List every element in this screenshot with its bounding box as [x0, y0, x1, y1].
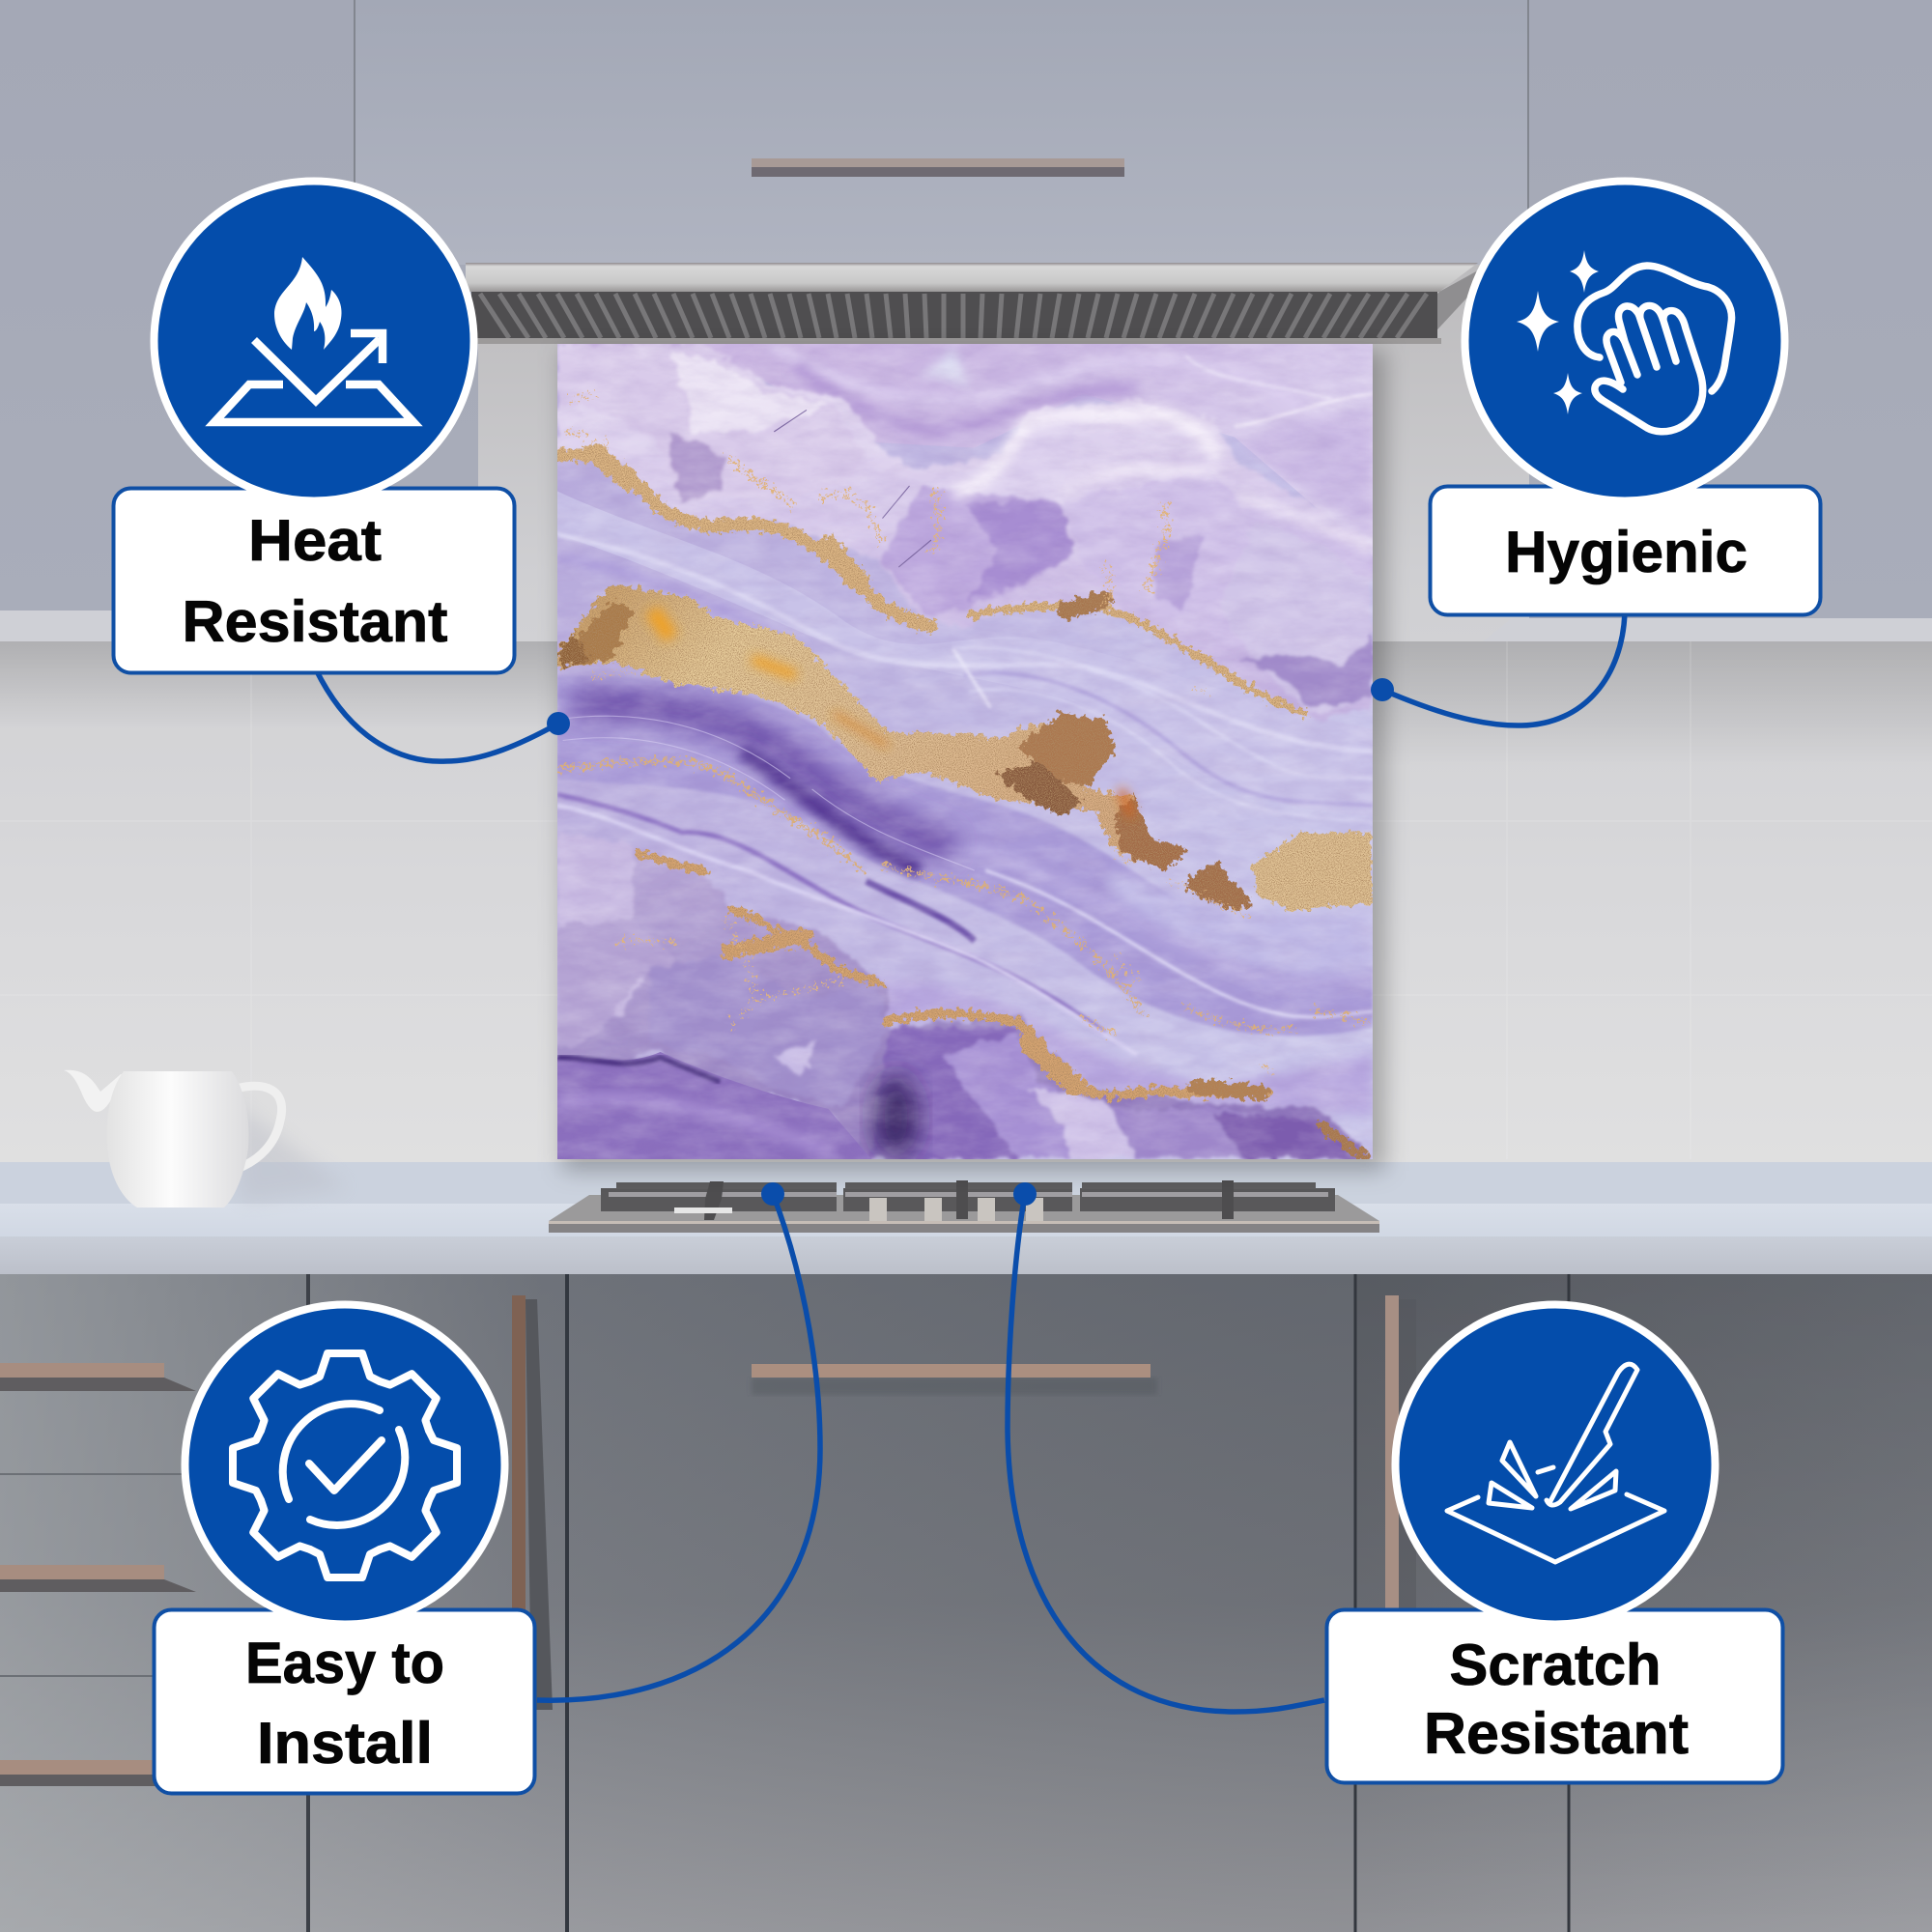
- gold speckles: [568, 394, 1269, 1071]
- heading: scratch resistant: Resistant: [1424, 1701, 1689, 1766]
- upper rock: [557, 344, 1373, 720]
- panel shadow: [562, 350, 1385, 1171]
- right gold patch: [1186, 833, 1373, 911]
- heading: heat resistant: Heat: [248, 508, 382, 573]
- cooker hood: [466, 263, 1478, 344]
- heading: heat resistant: [182, 508, 448, 654]
- wall tile lines: [0, 641, 1932, 1159]
- lower cabinets: [0, 1274, 1932, 1932]
- dark violet band: [557, 675, 1373, 1055]
- teapot: [64, 1070, 348, 1208]
- vertical handles: [512, 1295, 1416, 1710]
- marble mottling dark: [557, 344, 1373, 1159]
- marble splashback panel: [557, 344, 1373, 1159]
- top lilac swirl area: [557, 344, 1373, 556]
- icon: knife scratching surface: [1395, 1304, 1716, 1625]
- label box: [114, 489, 514, 672]
- heading: scratch resistant: [1424, 1633, 1689, 1766]
- label box: [1430, 487, 1820, 614]
- icon: flame over surface: [155, 182, 473, 500]
- icon: gear with check: [185, 1304, 504, 1625]
- heading: hygienic: Hygienic: [1505, 520, 1747, 584]
- right under-cabinet strip: [1373, 618, 1932, 767]
- upper gold vein: [557, 453, 1305, 713]
- thin gold lines in band: [557, 760, 1370, 1031]
- connector: hygienic: [1371, 611, 1625, 725]
- marble base: [557, 344, 1373, 1159]
- countertop: [0, 1204, 1932, 1274]
- large gold vein: [557, 583, 1191, 871]
- dark rock crevice: [873, 1073, 919, 1160]
- cabinet handle top: [752, 158, 1124, 177]
- bottom left purple band: [557, 1052, 871, 1159]
- connector: heat resistant: [316, 669, 570, 761]
- callout: hygienic: [1430, 182, 1820, 614]
- right lower pale area: [1104, 870, 1373, 976]
- lower gold vein: [639, 854, 1365, 1157]
- left under-cabinet strip: [0, 611, 557, 728]
- lilac lower wave area: [844, 981, 1373, 1114]
- drawer handles: [0, 1363, 196, 1786]
- hob: [549, 1180, 1379, 1233]
- lower left rock: [557, 833, 1373, 1159]
- connector: easy to install: [537, 1182, 820, 1700]
- connector: scratch resistant: [1008, 1182, 1324, 1712]
- centre drawer handle: [752, 1364, 1157, 1395]
- rock highlights: [952, 412, 1370, 546]
- callout: scratch resistant: [1327, 1304, 1783, 1783]
- heading: easy to install: Install: [257, 1711, 433, 1776]
- label box: [155, 1609, 535, 1793]
- pale agate bands: [557, 492, 1373, 822]
- icon: cleaning hand with sparkles: [1464, 182, 1785, 500]
- callout: heat resistant: [114, 182, 514, 672]
- callout: easy to install: [155, 1304, 535, 1793]
- heading: easy to install: Easy to: [245, 1631, 444, 1695]
- upper left cabinet: [0, 0, 478, 611]
- upper centre cabinet: [355, 0, 1529, 265]
- label box: [1327, 1609, 1783, 1783]
- heading: heat resistant: Resistant: [182, 589, 448, 654]
- upper right cabinet: [1529, 0, 1932, 618]
- marble mottling light: [557, 344, 1373, 1159]
- heading: easy to install: [245, 1631, 444, 1776]
- backsplash strip: [0, 1162, 1932, 1208]
- rock cracks: [774, 410, 931, 567]
- heading: scratch resistant: Scratch: [1449, 1633, 1662, 1697]
- gold fire highlights: [652, 611, 1131, 816]
